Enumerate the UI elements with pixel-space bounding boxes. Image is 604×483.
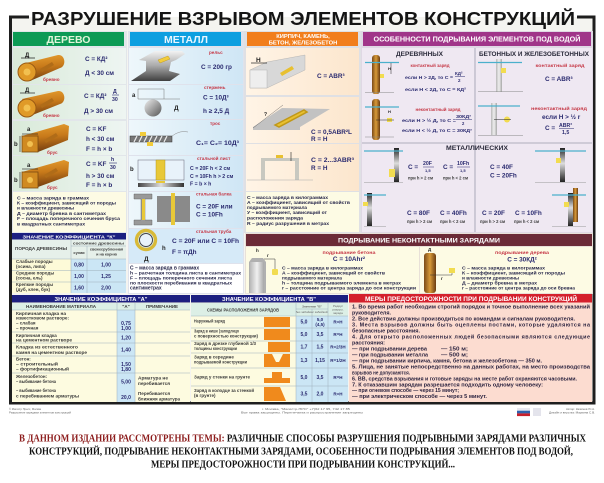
footer imprint left: [9, 407, 71, 414]
table: coefficient B: заряда: [333, 311, 343, 315]
table: coefficient A: перебивается: [138, 380, 170, 386]
table: coefficient A: известковом растворе:: [16, 316, 69, 320]
outer frame: [10, 17, 594, 403]
table: coefficient B: R=2/3H: [330, 344, 346, 350]
wood legend: и влажности древесины: [17, 206, 74, 210]
metal row: steel sheet: C = 20F h < 2 см: [190, 166, 230, 172]
metal legend: [129, 264, 243, 293]
concrete subsection: если H > ½ r: [542, 113, 581, 121]
metal row: steel pipe: h: [162, 246, 166, 252]
table: coefficient A: – выбивание бетона: [16, 378, 56, 384]
table: coefficient K: 0,80: [74, 262, 84, 268]
metal subsection: при h < 2 см: [514, 219, 539, 224]
wood row 4: beam: F = h × b: [86, 182, 112, 189]
table: coefficient B: Заряд в середине: [194, 354, 234, 360]
table: coefficient A: 1,80: [121, 367, 131, 373]
table: coefficient A: Бетон:: [16, 356, 31, 362]
safety text: [352, 304, 591, 400]
brick row 1: beam with charge: H: [256, 57, 261, 64]
brick legend: [246, 192, 359, 232]
table: coefficient B: Наружный заряд: [194, 318, 225, 324]
wood legend: F – площадь поперечного сечения бруса: [17, 215, 120, 221]
table: coefficient A: ПРИМЕЧАНИЕ: [146, 304, 178, 309]
safety text: 4. Для открыто расположенных людей безопасными являются следующие: [352, 334, 590, 340]
non-contact concrete: r – расстояние от центра заряда до оси конструкции: [282, 286, 416, 290]
non-contact wood: C = 30КД²: [507, 256, 537, 264]
table: coefficient B: 5,0: [301, 320, 308, 326]
table: coefficient B: 5,0: [301, 332, 308, 338]
metal subsection: МЕТАЛЛИЧЕСКИХ: [446, 145, 509, 152]
table: coefficient A: – слабая: [16, 320, 36, 326]
table: coefficient B: с забойкой: [312, 310, 328, 314]
wood header: [13, 32, 124, 46]
metal row: cable: C₁= C₂= 10Д³: [196, 140, 239, 147]
non-contact wood: и влажности древесины: [462, 276, 519, 280]
non-contact concrete: подрываемого материала: [282, 276, 342, 280]
table: coefficient B: 1,3: [301, 358, 308, 364]
title: РАЗРУШЕНИЕ ВЗРЫВОМ ЭЛЕМЕНТОВ КОНСТРУКЦИЙ: [31, 8, 575, 29]
brick row 1: beam with charge: [246, 48, 359, 95]
table: coefficient B: толщины конструкции: [194, 346, 237, 351]
brick header: [247, 32, 358, 46]
metal legend: С – масса заряда в граммах: [130, 266, 199, 272]
concrete subsection: ABR³: [559, 123, 572, 129]
charge scheme icons: [264, 317, 290, 401]
table: coefficient K: (осина, липа): [16, 264, 46, 269]
non-contact concrete: C = 10Ahr²: [333, 256, 365, 263]
metal subsection: C = 20Fh: [490, 172, 517, 180]
concrete subsection: C = ABR³: [545, 76, 573, 83]
table: coefficient B: с поверхностью конструкции): [194, 334, 258, 338]
table: coefficient K: 1,60: [74, 286, 84, 292]
table: coefficient B: СХЕМЫ РАСПОЛОЖЕНИЯ ЗАРЯДОВ: [207, 308, 280, 312]
non-contact concrete: h – толщина подрываемого элемента в метрах: [282, 280, 401, 286]
concrete subsection: [478, 51, 590, 136]
table: coefficient A: 5,00: [121, 380, 131, 386]
safety text: — при электрическом способе — через 5 минут.: [352, 393, 488, 400]
panel: underwater blasting: [361, 31, 593, 233]
table: coefficient B: 1,15: [315, 358, 325, 364]
non-contact wood: r – расстояние от центра заряда до оси бревна: [462, 284, 575, 290]
wood row 4: beam: h: [111, 157, 114, 163]
table: coefficient B: (в грунте): [194, 393, 216, 398]
footer imprint right: [549, 407, 595, 414]
metal subsection: 20F: [423, 161, 432, 167]
non-contact header: ПОДРЫВАНИЕ НЕКОНТАКТНЫМИ ЗАРЯДАМИ: [338, 238, 500, 244]
table: coefficient A: Арматура не: [138, 376, 169, 380]
safety text: 7. К отказавшим зарядам разрешается подходить одному человеку:: [352, 382, 543, 388]
table: coefficient K: ПОРОДА ДРЕВЕСИНЫ: [15, 246, 68, 251]
footer imprint centre: [241, 407, 363, 414]
wooden subsection: если H < 2Д, то C = КД²: [405, 87, 467, 92]
table: coefficient B: R=H: [333, 320, 343, 324]
metal subsection: C = 80F: [407, 210, 430, 217]
non-contact wood: Д – диаметр бревна в метрах: [462, 280, 537, 286]
table: coefficient B: 5,0: [317, 317, 324, 322]
metal row: steel sheet: [129, 155, 243, 191]
metal subsection: C =: [408, 164, 418, 171]
table: coefficient B: 5,0: [301, 375, 308, 381]
non-contact header: [246, 234, 592, 246]
metal subsection: при h > 2 см: [407, 219, 432, 224]
table: coefficient A: Кирпичная кладка на: [16, 311, 67, 316]
metal row: steel beam: C = 10Fh: [196, 212, 223, 218]
brick legend: расположения заряда: [247, 216, 303, 220]
table: coefficient B: 1,7: [301, 344, 308, 350]
metal row: steel beam: [129, 190, 243, 228]
table: coefficient K: 1,00: [101, 262, 111, 268]
wood row 2: round log: 30: [112, 97, 118, 103]
table: coefficient A: 1,40: [121, 348, 131, 354]
wooden subsection: ДЕРЕВЯННЫХ: [396, 51, 444, 58]
wood row 3: beam: C = KF: [86, 126, 107, 133]
underwater header: ОСОБЕННОСТИ ПОДРЫВАНИЯ ЭЛЕМЕНТОВ ПОД ВОДОЙ: [374, 34, 580, 44]
table: coefficient A: – выбивание бетона: [16, 387, 56, 393]
table: coefficient A: [12, 295, 190, 402]
table: coefficient B: Заряд в дрезке глубиной 1/3: [194, 340, 256, 346]
table: coefficient A: Железобетон:: [15, 373, 48, 379]
wood header: ДЕРЕВО: [47, 34, 90, 46]
wooden subsection: если H > 2Д, то C =: [405, 75, 453, 80]
metal row: rail: C = 200 гр: [201, 64, 232, 71]
metal row: rod: [129, 85, 243, 119]
table: coefficient A: камня на цементном растворе: [16, 350, 88, 355]
brick row 3: wall frame: [246, 144, 359, 191]
table: coefficient A: 20,0: [121, 395, 131, 401]
table: coefficient B: разруш.: [332, 308, 344, 312]
wood row 4: beam: h > 30 см: [86, 173, 115, 180]
metal subsection: при h > 2 см: [408, 176, 433, 180]
wooden subsection: неконтактный заряд: [416, 106, 461, 112]
metal row: rail: [129, 48, 243, 84]
table: coefficient K: 1,25: [101, 274, 111, 280]
metal row: steel sheet: стальной лист: [197, 155, 231, 161]
metal row: steel pipe: Д: [144, 256, 149, 263]
wood row 4: beam: [13, 156, 126, 191]
table: coefficient K: Слабые породы: [16, 258, 53, 264]
table: coefficient K: 1,00: [74, 274, 84, 280]
table: coefficient K: и на корню: [96, 252, 118, 256]
metal subsection: C =: [443, 164, 453, 171]
metal row: rod: h ≥ 2,5 Д: [203, 108, 230, 115]
metal row: cable: [129, 120, 243, 155]
metal row: steel beam: стальная балка: [196, 190, 232, 196]
wooden subsection: 30КД²: [456, 114, 472, 119]
footer imprint left: © Магистр Пресс, Москва: [9, 407, 41, 411]
brick legend: подрываемого материала: [247, 205, 307, 210]
wood row 4: beam: C = KF: [86, 161, 107, 168]
wooden subsection: H: [388, 66, 391, 71]
non-contact wood: r: [441, 276, 443, 281]
wood row 3: beam: брус: [47, 149, 58, 155]
table: coefficient B: (4,5): [315, 322, 325, 327]
table: coefficient B: 2,0: [317, 392, 324, 398]
wood legend: [13, 192, 126, 232]
table: coefficient B: Значение "В": [302, 304, 323, 308]
panel: brick, stone, concrete: [244, 31, 361, 233]
metal legend: h – расчетная толщина листа в сантиметрах: [130, 270, 241, 276]
metal subsection: при h < 2 см: [440, 219, 465, 224]
safety text: — при огневом способе — через 15 минут;: [352, 387, 459, 394]
wooden subsection: если H > ½ Д, то C =: [402, 118, 457, 123]
wooden subsection: H: [388, 109, 391, 114]
wood row 2: round log: [13, 85, 126, 119]
brick legend: С – масса заряда в килограммах: [247, 195, 328, 200]
metal header: [130, 32, 241, 46]
table: coefficient A: 1,00: [121, 326, 131, 332]
safety text: — 150 м;: [441, 346, 468, 352]
brick row 2: plate with charge: R = H: [311, 136, 328, 143]
wooden subsection: 2: [458, 78, 461, 83]
wood row 2: round log: Д > 30 см: [84, 108, 113, 115]
wood row 4: beam: b: [14, 178, 18, 184]
safety header: МЕРЫ ПРЕДОСТОРОЖНОСТИ ПРИ ПОДРЫВАНИИ КОНСТРУКЦИЙ: [365, 295, 578, 303]
safety text: 1. Во время работ необходим строгий порядок и точное выполнение всех указаний: [352, 304, 590, 310]
panel: metal: [128, 31, 244, 294]
table: coefficient A: на цементном растворе: [16, 338, 73, 342]
safety text: 5. Лица, не занятые непосредственно на данных работах, на место производства: [352, 364, 591, 370]
safety text: — при подрывании дерева: [352, 346, 428, 352]
table: coefficient K: Средние породы: [16, 270, 54, 276]
table: coefficient B: R=1/2H: [330, 358, 346, 363]
safety text: 3. Места взрывов должны быть оцеплены постами, которые удаляются на: [352, 322, 591, 328]
footer imprint centre: г. Москва, "Магистр-ПРО" +7(62 17 95, 742 17 85: [262, 407, 350, 411]
metal row: rod: Д: [174, 105, 179, 112]
table: coefficient A: Кладка из естественного: [16, 344, 78, 350]
metal subsection: 1,5: [425, 168, 431, 173]
caption: МЕРЫ ПРЕДОСТОРОЖНОСТИ ПРИ ПОДРЫВАНИИ КОНСТРУКЦИЙ...: [151, 458, 455, 470]
non-contact concrete: А – коэффициент, зависящий от свойств: [282, 270, 385, 276]
panel: non-contact charges: [245, 233, 593, 294]
metal subsection: C = 10Fh: [515, 210, 542, 217]
table: coefficient A: Перебивается: [138, 390, 170, 396]
wood row 1: round log: C = КД²: [85, 56, 107, 63]
safety text: 6. ВВ, средства взрывания и готовые заряды на месте работ охраняются часовыми.: [352, 376, 577, 382]
concrete subsection: C =: [545, 125, 555, 132]
table: coefficient B: Радиус: [333, 304, 343, 308]
table: coefficient K: (сосна, ель): [16, 276, 43, 280]
table: coefficient B: 3,5: [317, 375, 324, 381]
table: coefficient K: ЗНАЧЕНИЕ КОЭФФИЦИЕНТА "К": [22, 234, 116, 240]
wood row 2: round log: Д: [113, 89, 117, 95]
concrete subsection: неконтактный заряд: [531, 105, 587, 111]
safety text: — при подрывании металла: [352, 352, 429, 358]
safety text: безопасные расстояния.: [352, 328, 420, 334]
table: coefficient K: свежесрубленная: [90, 248, 123, 252]
wooden subsection: контактный заряд: [410, 62, 450, 68]
brick legend: У – коэффициент, зависящий от: [247, 209, 328, 215]
table: coefficient A: с перебиванием арматуры: [16, 392, 79, 398]
wood row 1: round log: Д: [25, 53, 30, 59]
wood row 4: beam: 30: [110, 165, 116, 171]
table: coefficient K: сухая: [73, 250, 85, 255]
table: coefficient K: состояние древесины: [73, 240, 125, 246]
brick row 3: wall frame: C = 2...3ABR³: [311, 157, 354, 164]
brick legend: R – радиус разрушения в метрах: [247, 221, 329, 226]
safety text: расстояния:: [352, 340, 385, 346]
table: coefficient B: Заряд в колодце за стенкой: [194, 387, 254, 393]
wooden subsection: 2: [462, 121, 465, 126]
metal subsection: C = 40Fh: [440, 210, 467, 217]
brick header: БЕТОН, ЖЕЛЕЗОБЕТОН: [269, 40, 337, 46]
metal subsection: C = 20F: [482, 210, 505, 217]
panel: wood: [12, 31, 127, 233]
metal row: steel pipe: [129, 228, 243, 263]
table: coefficient B: 3,5: [317, 332, 324, 338]
brick row 1: beam with charge: C = ABR³: [317, 73, 345, 80]
table: coefficient K: [12, 233, 126, 293]
metal row: steel pipe: C = 20F или C = 10Fh: [172, 238, 239, 245]
icon: publisher logo: [533, 408, 541, 416]
wood row 3: beam: h < 30 см: [86, 136, 115, 143]
safety text: — при подрывании кирпича, камня, бетона и железобетона — 350 м.: [352, 358, 542, 364]
wood row 1: round log: бревно: [43, 76, 60, 82]
metal subsection: при h > 2 см: [480, 219, 505, 224]
table: coefficient B: ЗНАЧЕНИЕ КОЭФФИЦИЕНТА "В": [222, 297, 317, 303]
wood row 3: beam: F = h × b: [86, 146, 112, 153]
metal row: steel sheet: F = b × h: [190, 182, 211, 188]
safety text: 2. Все действия должны производиться по командам и сигналам руководителя.: [352, 316, 575, 322]
wood row 1: round log: Д < 30 см: [85, 70, 114, 77]
metal legend: F – площадь поперечного сечения листа: [130, 276, 232, 280]
concrete subsection: БЕТОННЫХ И ЖЕЛЕЗОБЕТОННЫХ: [479, 51, 590, 58]
footer imprint right: Автор: Казимов Ю.А.: [566, 407, 595, 411]
brick legend: А – коэффициент, зависящий от свойств: [247, 199, 350, 205]
table: coefficient B: 1,5: [317, 344, 324, 350]
table: coefficient B: 3,5: [301, 392, 308, 398]
metal legend: сантиметрах: [130, 286, 162, 292]
metal subsection: 1,5: [460, 168, 466, 173]
brick row 2: plate with charge: ?: [264, 112, 267, 118]
footer imprint right: Дизайн и верстка: Маркина С.В.: [549, 410, 595, 414]
wood row 4: beam: a: [27, 163, 31, 169]
table: coefficient A: ЗНАЧЕНИЕ КОЭФФИЦИЕНТА "А": [54, 297, 148, 303]
metal header: МЕТАЛЛ: [164, 34, 208, 46]
wood row 3: beam: b: [14, 142, 18, 148]
wood row 3: beam: a: [27, 127, 31, 133]
wood legend: Д – диаметр бревна в сантиметрах: [17, 210, 106, 216]
wood row 2: round log: Д: [25, 88, 30, 94]
table: coefficient B: R=H: [333, 375, 343, 380]
wood legend: в квадратных сантиметрах: [17, 222, 85, 226]
metal row: steel pipe: стальная труба: [196, 228, 232, 234]
concrete subsection: 1,5: [562, 130, 569, 136]
metal subsection: C = 40F: [490, 164, 513, 171]
table: coefficient A: Кирпичная кладка: [16, 333, 57, 338]
table: coefficient B: R=H: [333, 392, 343, 396]
metal subsection: при h < 2 см: [443, 176, 468, 180]
table: coefficient A: 0,75: [121, 321, 131, 327]
table: coefficient A: – фортификационный: [16, 366, 69, 372]
wood row 2: round log: C = КД²: [84, 93, 106, 100]
wood row 2: round log: бревно: [43, 112, 60, 118]
non-contact concrete: [246, 247, 419, 293]
non-contact wood: подрывание дерева: [495, 250, 550, 255]
wood row 4: beam: брус: [47, 184, 58, 190]
table: coefficient A: – строительный: [16, 360, 58, 366]
non-contact wood: [420, 247, 592, 293]
brick row 2: plate with charge: C = 0,5ABR²L: [311, 129, 352, 136]
metal row: steel pipe: F = πДh: [172, 249, 197, 256]
table: coefficient K: Крепкие породы: [16, 282, 53, 287]
table: coefficient B: [191, 295, 348, 402]
wooden subsection: если H < ½ Д, то C = 30КД²: [402, 128, 473, 133]
safety header: [349, 294, 592, 303]
metal subsection: [363, 145, 586, 226]
metal subsection: 10Fh: [457, 161, 469, 167]
metal row: rod: a: [132, 93, 136, 99]
wooden subsection: [365, 51, 473, 140]
table: coefficient B: Заряд в нише (заподлицо: [194, 328, 239, 334]
table: coefficient A: "А": [122, 304, 130, 309]
brick row 3: wall frame: R = H: [311, 165, 328, 172]
non-contact concrete: подрывание бетона: [322, 249, 376, 255]
metal row: steel sheet: C = 10Fh h > 2 см: [190, 174, 233, 180]
wood row 1: round log: [13, 48, 126, 84]
table: coefficient B: R=H: [333, 332, 343, 337]
brick row 2: plate with charge: [246, 97, 359, 143]
wood legend: К – коэффициент, зависящий от породы: [17, 200, 116, 206]
table: coefficient A: 1,20: [121, 336, 131, 342]
metal row: steel sheet: b: [130, 167, 134, 173]
table: coefficient A: НАИМЕНОВАНИЕ МАТЕРИАЛА: [26, 304, 97, 309]
wood row 3: beam: [13, 121, 126, 155]
table: coefficient K: 2,00: [101, 286, 111, 292]
table: coefficient A: 1,50: [121, 362, 131, 368]
table: coefficient B: подрываемой конструкции: [194, 358, 247, 364]
metal row: steel beam: C = 20F или: [196, 204, 233, 210]
safety text: взрывов не допускаются.: [352, 370, 410, 376]
safety text: руководителя.: [352, 310, 391, 316]
safety text: — 500 м;: [441, 352, 468, 358]
panel: safety measures: [349, 294, 592, 402]
metal legend: по плоскости перебивания в квадратных: [130, 280, 232, 286]
brick header: КИРПИЧ, КАМЕНЬ,: [276, 34, 330, 40]
caption: [19, 434, 587, 470]
non-contact concrete: r: [267, 253, 269, 258]
table: coefficient B: Заряд у стенки на грунте: [194, 374, 250, 380]
metal row: rod: C = 10Д³: [203, 94, 229, 102]
non-contact wood: К – коэффициент, зависящий от породы: [462, 270, 565, 276]
icon: Russian flag: [517, 408, 530, 416]
footer imprint left: Разрушение зарядами элементов конструкций: [9, 410, 71, 414]
table: coefficient K: (дуб, клен, бук): [16, 286, 50, 292]
metal row: cable: трос: [210, 121, 221, 126]
wooden subsection: КД²: [455, 71, 463, 76]
non-contact wood: С – масса заряда в килограммах: [462, 266, 545, 270]
footer imprint centre: Все права защищены. Перепечатка и распространение запрещены: [241, 410, 363, 414]
table: coefficient A: ближняя арматура: [138, 396, 180, 402]
table: coefficient B: без забойки: [296, 310, 313, 314]
non-contact concrete: С – масса заряда в килограммах: [282, 266, 363, 270]
non-contact concrete: h: [256, 248, 259, 253]
wood legend: С – масса заряда в граммах: [17, 196, 89, 200]
concrete subsection: контактный заряд: [536, 62, 585, 68]
underwater header: [363, 32, 591, 46]
table: coefficient A: – прочная: [16, 326, 39, 330]
metal row: rail: рельс: [209, 50, 223, 55]
metal row: rod: стержень: [204, 85, 226, 90]
non-contact wood: Д: [428, 247, 432, 252]
